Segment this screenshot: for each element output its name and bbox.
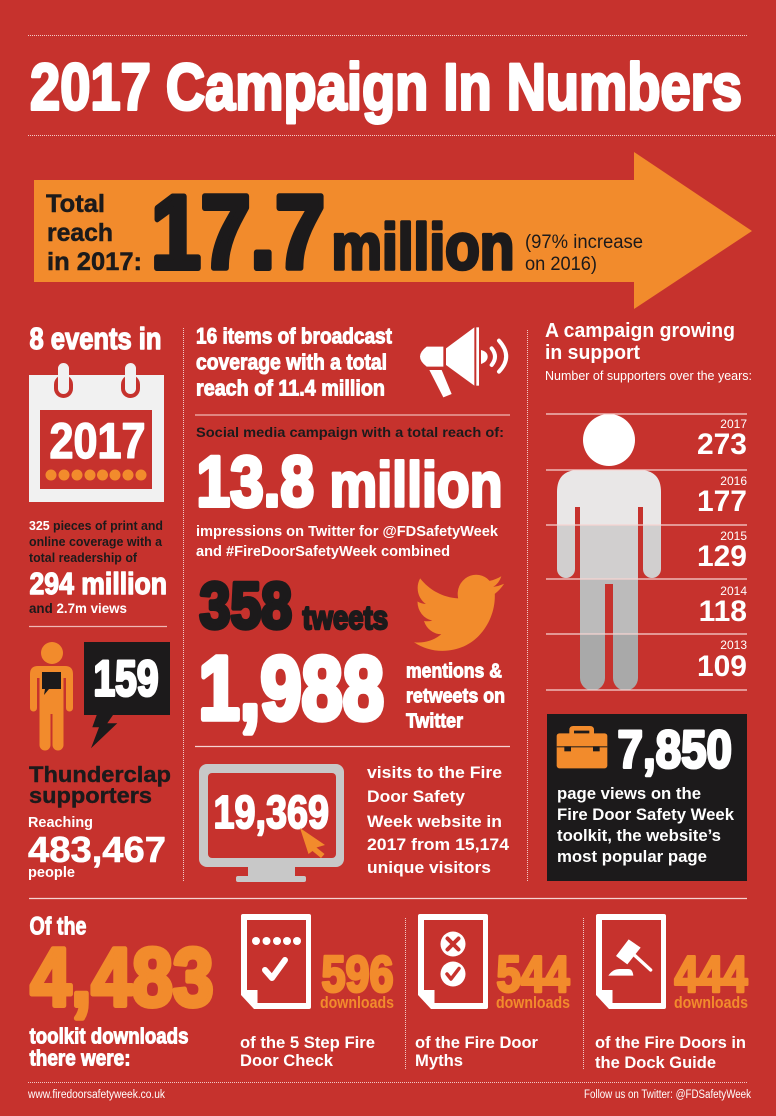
panel: Fire Door Myths downloads: Myths bbox=[415, 1051, 463, 1070]
panel: Fire Doors in the Dock Guide downloads: downloads bbox=[674, 994, 748, 1012]
panel: social media reach: million bbox=[330, 450, 502, 520]
text: print coverage: 325 pieces of print and bbox=[29, 519, 163, 533]
chart: person figure with year bands: 109 bbox=[697, 650, 747, 683]
panel: social media reach bbox=[196, 424, 504, 560]
banner arrow: total reach: (97% increase bbox=[525, 232, 643, 253]
text: broadcast coverage bbox=[196, 324, 393, 400]
text: Thunderclap: people bbox=[28, 864, 75, 881]
panel: social media reach: 13.8 bbox=[196, 443, 314, 522]
panel: tweets: 358 bbox=[200, 569, 292, 642]
callout: 159: 159 bbox=[94, 650, 158, 706]
panel: toolkit page views: toolkit, the website’s bbox=[557, 827, 721, 845]
text: print coverage: and 2.7m views bbox=[29, 601, 127, 616]
panel: 5 Step Fire Door Check downloads: downloads bbox=[320, 994, 394, 1012]
text: print coverage: online coverage with a bbox=[29, 535, 163, 549]
chart: person figure with year bands: 2017 bbox=[720, 417, 747, 431]
panel: broadcast coverage bbox=[196, 324, 506, 400]
chart: person figure with year bands: 129 bbox=[697, 540, 747, 573]
text: broadcast coverage: 16 items of broadcast bbox=[196, 324, 393, 348]
banner arrow: total reach: 17.7 bbox=[151, 175, 325, 291]
panel: 5 Step Fire Door Check downloads bbox=[240, 914, 394, 1070]
icon: monitor: 19,369 bbox=[214, 786, 329, 838]
text: visits: Door Safety bbox=[367, 787, 466, 806]
icon: calendar: 2017 bbox=[50, 413, 146, 469]
banner arrow: total reach bbox=[34, 152, 752, 309]
panel: 5 Step Fire Door Check downloads: Door Check bbox=[240, 1051, 334, 1070]
text: print coverage: 294 million bbox=[30, 566, 167, 601]
banner arrow: total reach: on 2016) bbox=[525, 254, 597, 275]
text: visits: unique visitors bbox=[367, 858, 491, 877]
icon: twitter bird bbox=[414, 575, 504, 651]
banner arrow: total reach: reach bbox=[47, 219, 113, 247]
panel: Fire Door Myths downloads: of the Fire Door bbox=[415, 1033, 538, 1052]
heading: growing in support: in support bbox=[545, 342, 640, 364]
panel: 5 Step Fire Door Check downloads: of the 5 Step Fire bbox=[240, 1033, 375, 1052]
panel: events and print coverage bbox=[29, 321, 167, 616]
footer: website: www.firedoorsafetyweek.co.uk bbox=[27, 1089, 165, 1101]
text: Thunderclap: supporters bbox=[29, 783, 152, 808]
panel: toolkit page views: page views on the bbox=[557, 785, 701, 803]
panel: toolkit downloads total: 4,483 bbox=[30, 930, 214, 1024]
icon: calendar bbox=[29, 363, 164, 502]
heading: growing in support: Number of supporters over the years: bbox=[545, 369, 752, 383]
chart: person figure with year bands: 2015 bbox=[720, 529, 747, 543]
icon: gavel document bbox=[596, 914, 666, 1009]
text: Thunderclap: Reaching bbox=[28, 814, 93, 831]
icon: megaphone bbox=[420, 327, 506, 397]
text: visits bbox=[367, 763, 510, 877]
panel: tweets: 1,988 bbox=[198, 639, 384, 739]
text: visits: visits to the Fire bbox=[367, 763, 502, 782]
text: Thunderclap: 483,467 bbox=[28, 829, 166, 870]
panel: toolkit page views: Fire Door Safety Week bbox=[557, 806, 735, 824]
icon: checklist document bbox=[241, 914, 311, 1009]
panel: Fire Doors in the Dock Guide downloads: the Dock Guide bbox=[595, 1053, 716, 1072]
banner arrow: total reach: in 2017: bbox=[47, 248, 142, 276]
heading: growing in support bbox=[545, 320, 752, 383]
panel: social media reach: and #FireDoorSafetyWeek combined bbox=[196, 543, 450, 560]
panel: toolkit downloads total: Of the bbox=[30, 912, 87, 940]
chart: person figure with year bands: 118 bbox=[699, 595, 747, 628]
text: broadcast coverage: coverage with a total bbox=[196, 350, 387, 374]
icon: orange person with speech bubble bbox=[30, 642, 73, 750]
text: broadcast coverage: reach of 11.4 million bbox=[196, 376, 385, 400]
panel: 5 Step Fire Door Check downloads: 596 bbox=[322, 946, 394, 1002]
banner arrow: total reach: Total bbox=[46, 190, 105, 218]
panel: toolkit page views bbox=[547, 714, 747, 881]
text: Thunderclap bbox=[28, 762, 171, 881]
panel: toolkit page views: most popular page bbox=[557, 848, 707, 866]
panel: tweets: Twitter bbox=[406, 710, 463, 732]
callout: 159 bbox=[84, 642, 170, 748]
chart: person figure with year bands: 2016 bbox=[720, 474, 747, 488]
icon: true/false document bbox=[418, 914, 488, 1009]
panel: toolkit downloads total: toolkit downloads bbox=[30, 1024, 188, 1048]
panel: social media reach: impressions on Twitter for @FDSafetyWeek bbox=[196, 523, 499, 540]
chart: person figure with year bands: 273 bbox=[697, 428, 747, 461]
heading: 8 events: 8 events in bbox=[30, 321, 162, 356]
panel: social media reach: Social media campaign with a total reach of: bbox=[196, 424, 504, 440]
panel: toolkit page views: 7,850 bbox=[618, 720, 732, 780]
text: print coverage: total readership of bbox=[29, 551, 138, 565]
icon: toolbox bbox=[557, 726, 607, 768]
chart: person figure with year bands bbox=[546, 414, 747, 690]
text: print coverage bbox=[29, 519, 167, 616]
panel: Fire Doors in the Dock Guide downloads bbox=[595, 914, 748, 1072]
chart: person figure with year bands: 2013 bbox=[720, 638, 747, 652]
panel: Fire Door Myths downloads: 544 bbox=[496, 946, 570, 1002]
panel: tweets: retweets on bbox=[406, 686, 505, 708]
panel: tweets: mentions & bbox=[406, 660, 502, 682]
banner arrow: total reach: million bbox=[332, 210, 514, 283]
panel: toolkit downloads total: there were: bbox=[30, 1046, 130, 1070]
text: Thunderclap: Thunderclap bbox=[29, 762, 171, 787]
heading: growing in support: A campaign growing bbox=[545, 320, 735, 342]
panel: Thunderclap supporters bbox=[28, 642, 171, 881]
text: visits: 2017 from 15,174 bbox=[367, 835, 510, 854]
icon: monitor bbox=[199, 764, 344, 882]
panel: campaign growing in support bbox=[545, 320, 752, 690]
panel: toolkit downloads total bbox=[30, 912, 214, 1070]
panel: Fire Door Myths downloads bbox=[415, 914, 570, 1070]
panel: tweets: tweets bbox=[302, 599, 388, 636]
chart: person figure with year bands: 177 bbox=[697, 485, 747, 518]
text: visits: Week website in bbox=[367, 812, 502, 831]
panel: Fire Doors in the Dock Guide downloads: 444 bbox=[674, 946, 748, 1002]
panel: website visits bbox=[199, 763, 510, 882]
panel: Fire Door Myths downloads: downloads bbox=[496, 994, 570, 1012]
panel: Fire Doors in the Dock Guide downloads: of the Fire Doors in bbox=[595, 1033, 746, 1052]
panel: tweets bbox=[198, 569, 505, 739]
chart: person figure with year bands: 2014 bbox=[720, 584, 747, 598]
footer: twitter handle: Follow us on Twitter: @FDSafetyWeek bbox=[584, 1089, 751, 1101]
